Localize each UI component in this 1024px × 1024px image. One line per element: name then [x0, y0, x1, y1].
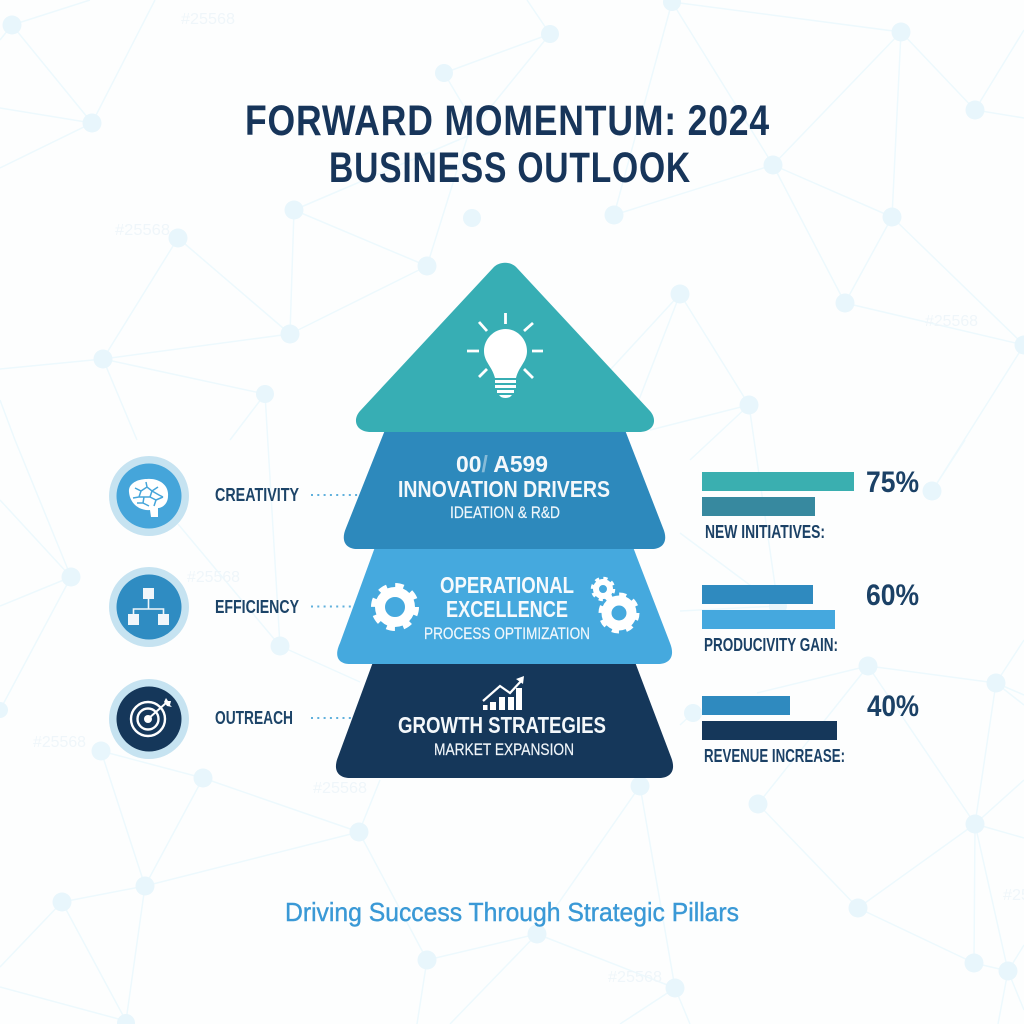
tier: growth strategies — [336, 662, 673, 778]
icon: target — [109, 679, 189, 759]
background network: #25568 — [925, 313, 978, 330]
tier: operational excellence: EXCELLENCE — [446, 596, 568, 622]
metric: new initiatives — [702, 466, 919, 542]
tier: growth strategies: GROWTH STRATEGIES — [398, 712, 606, 738]
pyramid — [336, 263, 673, 778]
icon: light bulb — [467, 313, 543, 398]
icon: growth chart — [483, 676, 524, 710]
tier: top triangle — [356, 263, 654, 432]
metric: revenue increase: 40% — [867, 690, 919, 723]
icon: brain — [109, 456, 189, 536]
background network: #25568 — [181, 11, 235, 28]
metric: revenue increase: REVENUE INCREASE: — [704, 746, 845, 766]
tier: innovation drivers — [344, 430, 665, 549]
metric: productivity gain: 60% — [866, 579, 919, 612]
title: FORWARD MOMENTUM: 2024 — [245, 97, 770, 145]
tier: innovation drivers: 00/ A599 — [456, 451, 548, 477]
title — [245, 97, 770, 192]
tier: growth strategies: MARKET EXPANSION — [434, 741, 574, 759]
icon: org chart — [109, 567, 189, 647]
item: creativity — [109, 456, 358, 536]
item: efficiency — [109, 567, 352, 647]
background network: #25568 — [313, 780, 367, 797]
tier: innovation drivers: IDEATION & R&D — [450, 504, 560, 522]
background network: #25568 — [115, 222, 170, 239]
title: BUSINESS OUTLOOK — [329, 144, 691, 192]
tier: innovation drivers: INNOVATION DRIVERS — [398, 476, 610, 502]
item: efficiency: EFFICIENCY — [215, 597, 299, 617]
tier: operational excellence: OPERATIONAL — [440, 572, 574, 598]
icon: gears right — [592, 578, 637, 631]
icon: gear left — [374, 586, 416, 628]
background network: #25568 — [33, 734, 86, 751]
tier: operational excellence — [337, 547, 672, 664]
metric: revenue increase — [702, 690, 919, 766]
item: creativity: CREATIVITY — [215, 485, 299, 505]
metric: productivity gain: PRODUCIVITY GAIN: — [704, 635, 838, 655]
item: outreach — [109, 679, 352, 759]
metric: productivity gain — [702, 579, 919, 655]
metric: new initiatives: NEW INITIATIVES: — [705, 522, 825, 542]
background network: #25568 — [608, 969, 662, 986]
metric: new initiatives: 75% — [866, 466, 919, 499]
background network: #25568 — [187, 569, 240, 586]
item: outreach: OUTREACH — [215, 708, 293, 728]
tier: operational excellence: PROCESS OPTIMIZATION — [424, 625, 590, 643]
tagline: Driving Success Through Strategic Pillars — [285, 897, 739, 927]
